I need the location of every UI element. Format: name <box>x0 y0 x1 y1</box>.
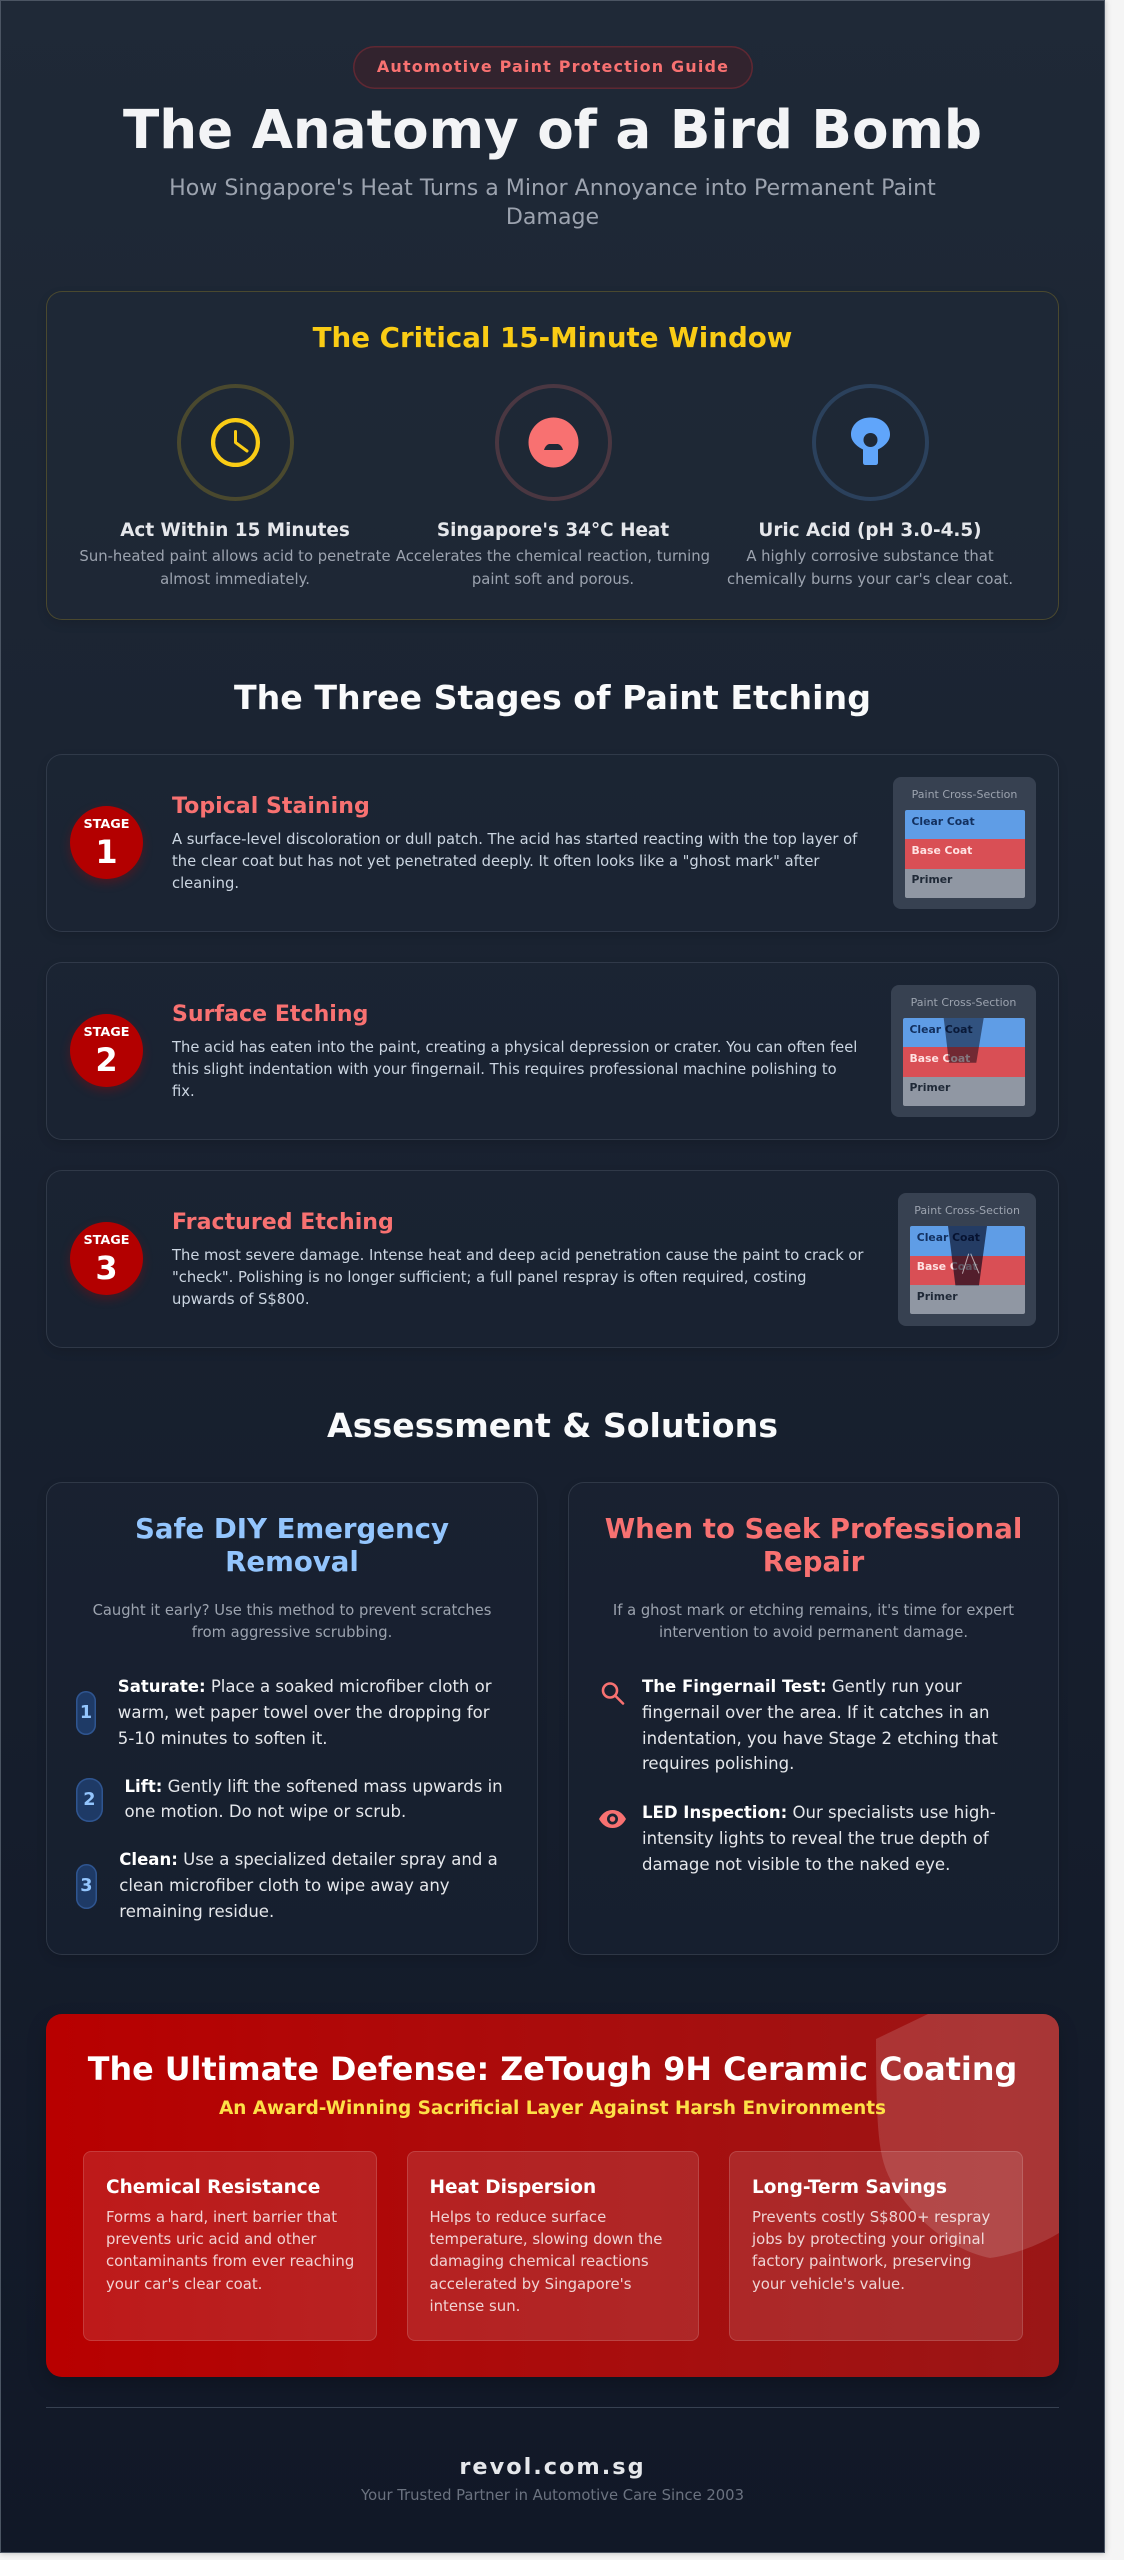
stage 2 description: fix. <box>172 1083 195 1100</box>
panel: stage 2 <box>46 962 1059 1140</box>
step text: clean: Clean: Use a specialized detailer spray and a <box>119 1850 498 1869</box>
card: chemical resistance <box>83 2151 376 2341</box>
card text: temperature, slowing down the <box>430 2230 662 2248</box>
description: act within 15 minutes <box>79 548 391 588</box>
card title: Heat Dispersion <box>430 2176 596 2198</box>
layer: primer: Primer <box>912 873 952 886</box>
crater: acid depression <box>944 1018 984 1063</box>
label: uric acid: Uric Acid (pH 3.0-4.5) <box>758 520 982 541</box>
heading: professional repair: When to Seek Professional <box>605 1512 1022 1544</box>
stage 1 description: the clear coat but has not yet penetrated deeply. It often looks like a "ghost mark" after <box>172 853 819 870</box>
panel: stage 1 <box>46 754 1059 932</box>
layer: base coat <box>902 1047 1025 1077</box>
card text: contaminants from ever reaching <box>106 2252 354 2270</box>
intro: DIY removal: Caught it early? Use this method to prevent scratches <box>93 1602 491 1619</box>
icon: sun heat <box>494 384 612 501</box>
card text: prevents uric acid and other <box>106 2230 316 2248</box>
icon: acid drop <box>812 384 928 501</box>
layer: clear coat <box>902 1018 1025 1047</box>
stage 3 badge: 3 <box>95 1249 118 1287</box>
step 2 <box>76 1776 503 1822</box>
heading: assessment and solutions: Assessment & Solutions <box>327 1406 778 1445</box>
layer: clear coat: Clear Coat <box>917 1231 980 1244</box>
stage 3 description: The most severe damage. Intense heat and deep acid penetration cause the paint to crack or <box>172 1246 863 1264</box>
panel: stage 3 <box>46 1170 1059 1348</box>
panel: safe DIY emergency removal <box>46 1482 538 1955</box>
stage 2 badge <box>70 1014 143 1087</box>
intro: professional repair: intervention to avoid permanent damage. <box>659 1624 968 1641</box>
stage 1 description: A surface-level discoloration or dull patch. The acid has started reacting with the top layer of <box>172 830 857 848</box>
header badge <box>353 46 753 88</box>
item: fingernail test <box>602 1677 998 1773</box>
card text: your car's clear coat. <box>106 2275 262 2293</box>
card text: your vehicle's value. <box>752 2275 905 2293</box>
stage 1 badge: 1 <box>95 833 118 871</box>
card text <box>106 2208 354 2293</box>
card text: jobs by protecting your original <box>752 2230 985 2248</box>
heading: DIY removal <box>135 1512 449 1578</box>
layer: base coat: Base Coat <box>910 1052 970 1065</box>
stage 2 title: Surface Etching <box>172 1001 368 1027</box>
stage 3 badge <box>70 1222 143 1295</box>
layer: primer: Primer <box>917 1290 958 1303</box>
item: uric acid <box>727 384 1013 588</box>
card text: accelerated by Singapore's <box>430 2275 631 2293</box>
text: LED inspection: LED Inspection: Our specialists use high- <box>642 1803 996 1822</box>
text: fingernail test <box>642 1677 998 1773</box>
text: fingernail test: requires polishing. <box>642 1754 794 1773</box>
text: LED inspection <box>642 1803 996 1874</box>
card text: damaging chemical reactions <box>430 2252 649 2270</box>
label: singapore heat: Singapore's 34°C Heat <box>437 520 669 541</box>
layer: primer <box>910 1285 1025 1314</box>
text: LED inspection: damage not visible to the naked eye. <box>642 1855 950 1874</box>
subheading: sacrificial layer: An Award-Winning Sacrificial Layer Against Harsh Environments <box>219 2098 886 2119</box>
stage 3 badge: STAGE <box>83 1233 130 1248</box>
step text: saturate: Saturate: Place a soaked microfiber cloth or <box>118 1677 492 1696</box>
layer: primer <box>904 869 1025 898</box>
stage 3 title: Fractured Etching <box>172 1209 394 1235</box>
diagram: paint cross-section stage 2 <box>891 985 1036 1117</box>
stage 2 description: The acid has eaten into the paint, creating a physical depression or crater. You can often feel <box>172 1038 857 1056</box>
step number 1: 1 <box>80 1703 92 1723</box>
footer website: revol.com.sg <box>459 2454 646 2480</box>
step number 3: 3 <box>80 1876 92 1896</box>
title: The Anatomy of a Bird Bomb <box>123 99 982 161</box>
step text: saturate: 5-10 minutes to soften it. <box>118 1729 328 1748</box>
stage 1 title: Topical Staining <box>172 793 370 819</box>
footer tagline: Your Trusted Partner in Automotive Care Since 2003 <box>361 2487 744 2504</box>
card text: intense sun. <box>430 2297 520 2315</box>
step number 1 <box>76 1691 96 1735</box>
intro: DIY removal <box>93 1602 491 1641</box>
heading: professional repair <box>605 1512 1022 1578</box>
step number 3 <box>76 1864 97 1909</box>
description: singapore heat <box>396 548 710 588</box>
text: fingernail test: fingernail over the area. If it catches in an <box>642 1703 990 1722</box>
layer: base coat: Base Coat <box>917 1260 978 1273</box>
layer: primer: Primer <box>910 1081 950 1094</box>
card text: factory paintwork, preserving <box>752 2252 972 2270</box>
card text <box>752 2208 990 2293</box>
step text: clean: remaining residue. <box>119 1902 274 1921</box>
step number 2: 2 <box>83 1790 95 1810</box>
icon: decorative shield <box>876 2014 1059 2258</box>
intro: DIY removal: from aggressive scrubbing. <box>192 1624 392 1641</box>
card: heat dispersion <box>406 2151 699 2341</box>
heading: three stages: The Three Stages of Paint Etching <box>234 678 871 717</box>
stage 2 badge: STAGE <box>83 1025 130 1040</box>
stage 3 description: upwards of S$800. <box>172 1291 310 1308</box>
stage 2 description <box>172 1038 857 1100</box>
heading: DIY removal: Removal <box>225 1544 359 1578</box>
panel: critical 15-minute window <box>46 291 1059 620</box>
layer: clear coat <box>904 810 1025 839</box>
heading: ultimate defense: The Ultimate Defense: ZeTough 9H Ceramic Coating <box>88 2051 1017 2088</box>
step text: saturate: warm, wet paper towel over the dropping for <box>118 1703 490 1722</box>
layer: clear coat <box>910 1226 1025 1256</box>
description: singapore heat: Accelerates the chemical reaction, turning <box>396 548 710 565</box>
description: uric acid <box>727 548 1013 588</box>
icon: eye <box>599 1810 626 1828</box>
text: LED inspection: intensity lights to reveal the true depth of <box>642 1829 989 1848</box>
item: LED inspection <box>599 1803 996 1874</box>
stage 3 description <box>172 1246 864 1308</box>
heading: DIY removal: Safe DIY Emergency <box>135 1512 449 1544</box>
heading: critical window: The Critical 15-Minute Window <box>313 321 792 354</box>
card text: Helps to reduce surface <box>430 2208 606 2226</box>
stage 1 description <box>172 830 858 892</box>
card: long-term savings <box>729 2151 1022 2341</box>
layer: clear coat: Clear Coat <box>910 1023 973 1036</box>
text: fingernail test: indentation, you have Stage 2 etching that <box>642 1729 998 1748</box>
layer: primer <box>902 1077 1025 1106</box>
card text: Forms a hard, inert barrier that <box>106 2208 337 2226</box>
layer: base coat: Base Coat <box>912 844 972 857</box>
item: act within 15 minutes <box>79 384 391 588</box>
description: singapore heat: paint soft and porous. <box>472 571 634 588</box>
subtitle: How Singapore's Heat Turns a Minor Annoyance into Permanent Paint <box>169 174 936 200</box>
description: act within 15 minutes: Sun-heated paint allows acid to penetrate <box>79 548 391 565</box>
step text: clean <box>119 1850 498 1921</box>
step text: lift: one motion. Do not wipe or scrub. <box>124 1802 406 1821</box>
subtitle: Damage <box>506 204 599 230</box>
subtitle <box>169 174 936 230</box>
crater: fractured depression with cracks <box>948 1226 987 1286</box>
step number 2 <box>76 1778 103 1822</box>
stage 1 badge: STAGE <box>83 817 130 832</box>
diagram: paint cross-section stage 3 <box>898 1193 1036 1326</box>
diagram caption: Paint Cross-Section <box>912 788 1017 801</box>
icon: magnifier <box>602 1682 624 1705</box>
stage 1 description: cleaning. <box>172 875 239 892</box>
step text: lift: Lift: Gently lift the softened mass upwards in <box>124 1776 503 1796</box>
description: uric acid: A highly corrosive substance that <box>746 548 994 565</box>
step text: saturate <box>118 1677 492 1748</box>
panel: ultimate defense ceramic coating <box>46 2014 1059 2377</box>
heading: professional repair: Repair <box>763 1544 864 1578</box>
icon: clock <box>176 384 294 501</box>
step text: lift <box>124 1776 503 1821</box>
text: fingernail test: The Fingernail Test: Gently run your <box>642 1677 962 1696</box>
card title: Long-Term Savings <box>752 2176 947 2198</box>
diagram: paint cross-section stage 1 <box>893 777 1036 909</box>
header badge: Automotive Paint Protection Guide <box>377 57 729 76</box>
intro: professional repair: If a ghost mark or etching remains, it's time for expert <box>613 1602 1014 1619</box>
card text <box>430 2208 662 2315</box>
step 3 <box>76 1850 498 1921</box>
description: uric acid: chemically burns your car's clear coat. <box>727 571 1013 588</box>
stage 2 description: this slight indentation with your fingernail. This requires professional machine polishing to <box>172 1061 837 1078</box>
intro: professional repair <box>613 1602 1014 1641</box>
card text: Prevents costly S$800+ respray <box>752 2208 990 2226</box>
diagram caption: Paint Cross-Section <box>911 996 1016 1009</box>
step 1 <box>76 1677 492 1748</box>
layer: base coat <box>904 839 1025 869</box>
diagram caption: Paint Cross-Section <box>914 1204 1020 1217</box>
card title: Chemical Resistance <box>106 2176 320 2198</box>
panel: when to seek professional repair <box>568 1482 1059 1955</box>
layer: base coat <box>910 1256 1025 1285</box>
stage 2 badge: 2 <box>95 1041 118 1079</box>
stage 1 badge <box>70 806 143 879</box>
stage 3 description: "check". Polishing is no longer sufficient; a full panel respray is often required, costing <box>172 1269 807 1286</box>
step text: clean: clean microfiber cloth to wipe away any <box>119 1876 450 1895</box>
layer: clear coat: Clear Coat <box>912 815 975 828</box>
description: act within 15 minutes: almost immediately. <box>160 571 310 588</box>
label: act within 15 minutes: Act Within 15 Minutes <box>120 520 350 541</box>
item: singapore heat <box>396 384 710 588</box>
